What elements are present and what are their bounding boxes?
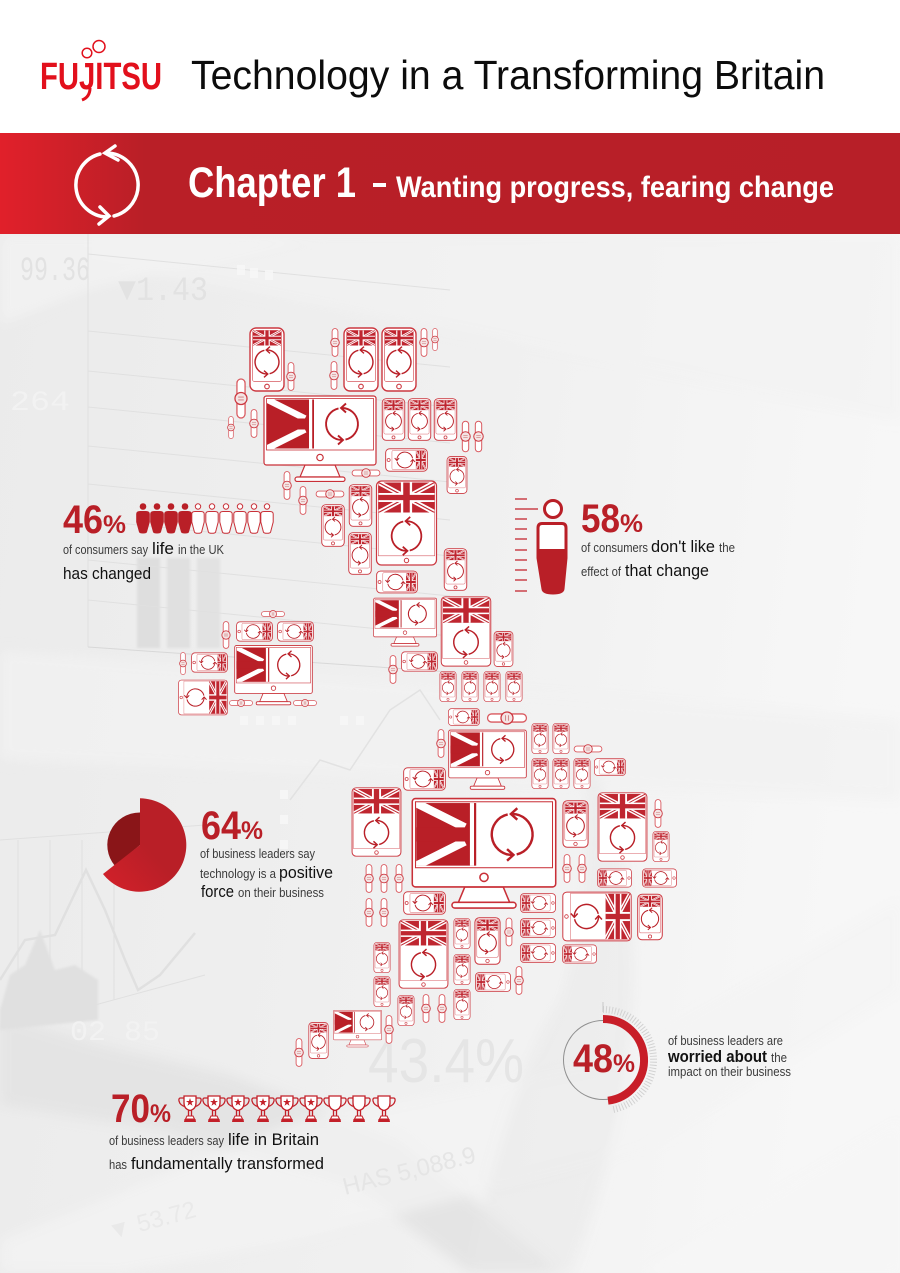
watch [437, 730, 445, 757]
trophies pictogram [179, 1096, 395, 1122]
watch horizontal [488, 712, 526, 724]
phone [553, 723, 569, 754]
caption: of consumers say [63, 543, 149, 557]
phone [434, 399, 457, 440]
chapter heading [188, 159, 834, 207]
phone [382, 328, 416, 391]
watch [222, 622, 230, 648]
watch [654, 800, 662, 827]
caption: of consumers [581, 541, 648, 555]
watch [563, 855, 571, 882]
phone landscape [237, 622, 272, 641]
caption: positive [279, 863, 333, 882]
phone landscape [404, 768, 445, 790]
watch [474, 421, 483, 452]
watch [330, 362, 338, 389]
phone [532, 758, 548, 789]
phone [454, 918, 470, 949]
phone [440, 671, 456, 702]
phone landscape [386, 449, 427, 471]
phone [344, 328, 378, 391]
watch [331, 329, 339, 356]
caption: the [719, 541, 735, 555]
watch [287, 363, 295, 390]
phone [574, 758, 590, 789]
grey financial data background: 43.4% [368, 1027, 524, 1096]
phone landscape [448, 709, 480, 725]
watch horizontal [352, 469, 380, 477]
phone landscape [521, 919, 555, 937]
figure 70%: % [150, 1100, 171, 1128]
phone [638, 894, 662, 940]
phone [444, 549, 467, 590]
stat: 58% consumers [515, 497, 735, 594]
caption: technology is a [200, 867, 276, 881]
phone [553, 758, 569, 789]
caption: has changed [63, 564, 151, 583]
figure 70%: 70 [111, 1087, 150, 1131]
phone [653, 831, 669, 862]
watch horizontal [293, 699, 317, 707]
watch [515, 967, 523, 994]
watch [395, 865, 403, 892]
caption [63, 539, 225, 583]
watch [578, 855, 586, 882]
watch [250, 410, 258, 437]
phone [454, 989, 470, 1020]
caption: on their business [238, 886, 324, 900]
figure 58%: 58 [581, 497, 620, 541]
phone [398, 995, 414, 1026]
figure 58%: % [620, 510, 643, 538]
tablet [352, 788, 401, 856]
caption: has [109, 1158, 127, 1172]
grey financial data background: 264 [10, 388, 70, 419]
phone landscape [598, 869, 631, 887]
caption [581, 537, 735, 580]
phone [349, 485, 372, 526]
stat: 48% business leaders [564, 1002, 791, 1110]
monitor [333, 1010, 382, 1047]
watch [295, 1039, 303, 1066]
watch [385, 1016, 393, 1043]
icon: refresh arrows [76, 146, 138, 224]
phone landscape [643, 869, 676, 887]
caption: don't like [651, 537, 715, 556]
phone landscape [563, 945, 596, 963]
pie chart [103, 798, 186, 892]
watch [432, 328, 438, 351]
figure 64%: 64 [201, 804, 242, 848]
phone [447, 457, 467, 493]
people pictogram [136, 503, 273, 534]
caption: of business leaders say [109, 1134, 225, 1148]
caption: of business leaders say [200, 847, 316, 861]
watch [505, 918, 513, 946]
phone [454, 954, 470, 985]
icon: person [537, 500, 567, 594]
tablet [376, 481, 436, 565]
phone landscape [377, 571, 417, 593]
phone landscape [192, 653, 227, 672]
radial gauge [564, 1002, 654, 1110]
caption [667, 1034, 791, 1079]
phone [322, 505, 344, 546]
phone landscape [476, 973, 510, 991]
watch horizontal [316, 490, 344, 498]
figure 46%: % [103, 511, 126, 539]
grey financial data background: ▼ 53.72 [105, 1196, 199, 1246]
watch [283, 472, 291, 499]
watch [299, 487, 307, 514]
caption: force [201, 882, 234, 901]
watch horizontal [261, 610, 285, 618]
phone landscape [521, 944, 555, 962]
phone [462, 671, 478, 702]
chapter heading: Chapter 1 [188, 159, 356, 207]
phone [563, 801, 588, 847]
title: Technology in a Transforming Britain [191, 52, 825, 98]
tablet landscape [179, 680, 227, 715]
watch [380, 899, 388, 926]
caption: that change [625, 561, 709, 580]
monitor [235, 646, 312, 705]
watch [389, 656, 397, 683]
phone [382, 399, 405, 440]
caption: worried about [667, 1047, 767, 1066]
caption: in the UK [178, 543, 225, 557]
watch horizontal [229, 699, 253, 707]
phone [484, 671, 500, 702]
phone landscape [404, 892, 445, 914]
ruler ticks [515, 499, 538, 591]
watch [235, 379, 247, 418]
phone landscape [521, 894, 555, 912]
caption [109, 1130, 324, 1173]
chapter heading: Wanting progress, fearing change [396, 171, 834, 204]
phone [349, 533, 371, 574]
watch [422, 995, 430, 1022]
phone [374, 976, 390, 1007]
watch [228, 416, 234, 439]
watch [438, 995, 446, 1022]
tablet [441, 597, 491, 666]
caption: life [152, 539, 174, 558]
monitor large [412, 799, 556, 908]
logo: Fujitsu: FUJITSU [40, 56, 162, 98]
grey financial data background: ▼1.43 [118, 273, 208, 311]
grey financial data background: HAS 5,088.9 [340, 1142, 479, 1201]
watch [461, 421, 470, 452]
caption [200, 847, 333, 901]
watch [180, 652, 186, 675]
caption: of business leaders are [668, 1034, 783, 1048]
phone [250, 328, 284, 391]
stat: 70% business leaders [109, 1087, 395, 1173]
grey financial data background: 02 85 [70, 1018, 160, 1049]
watch horizontal [574, 745, 602, 753]
monitor [449, 730, 526, 789]
figure 46%: 46 [63, 498, 103, 542]
white header background [0, 0, 900, 133]
grey financial data background: 99.36 [20, 253, 90, 291]
monitor [374, 598, 436, 646]
watch [365, 865, 373, 892]
caption: life in Britain [228, 1130, 319, 1149]
phone [475, 918, 500, 964]
phone [494, 632, 513, 666]
tablet [399, 920, 448, 988]
watch [380, 865, 388, 892]
chapter banner [0, 133, 900, 234]
caption: fundamentally transformed [131, 1154, 324, 1173]
tablet [598, 793, 647, 861]
phone [309, 1023, 328, 1058]
stat: 46% consumers [63, 498, 273, 583]
caption: effect of [581, 565, 621, 579]
watch [365, 899, 373, 926]
monitor [264, 396, 376, 482]
logo: Fujitsu [40, 40, 162, 100]
phone landscape [402, 652, 437, 671]
phone [532, 723, 548, 754]
figure 64%: % [241, 817, 263, 845]
phone [374, 942, 390, 973]
stat: 64% business leaders [103, 798, 333, 901]
UK map built from devices [179, 328, 676, 1066]
figure 48%: 48 [573, 1037, 613, 1081]
caption: the [771, 1051, 787, 1065]
phone landscape [278, 622, 313, 641]
watch [420, 329, 428, 356]
phone [506, 671, 522, 702]
figure 48%: % [613, 1050, 635, 1078]
tablet landscape [563, 892, 631, 941]
phone landscape [594, 759, 626, 775]
phone [408, 399, 431, 440]
caption: impact on their business [668, 1065, 791, 1079]
